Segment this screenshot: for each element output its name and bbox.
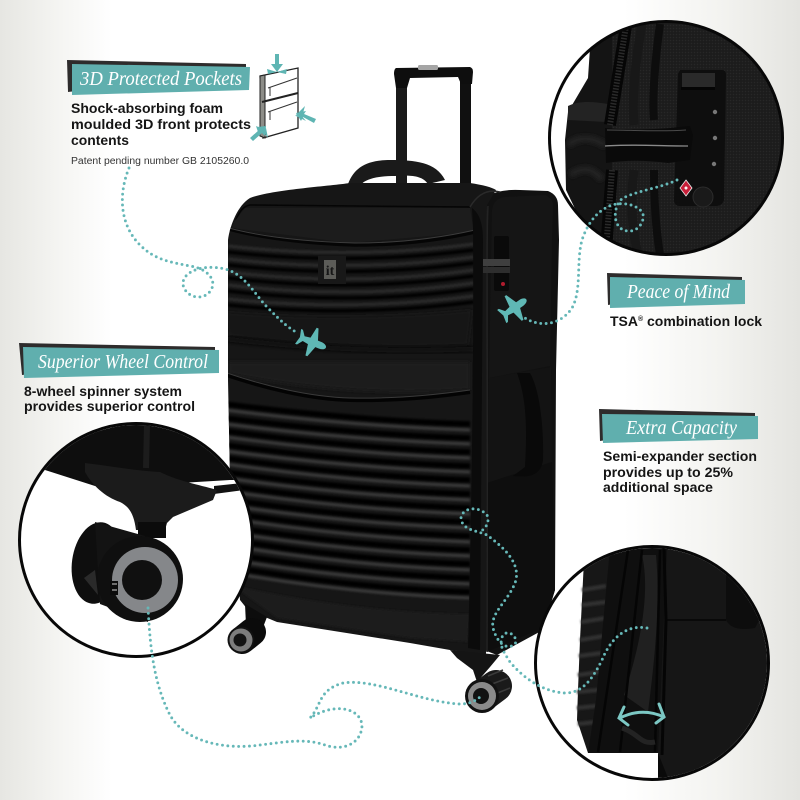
dotted route: lock to plane <box>522 180 677 324</box>
gusset <box>588 548 668 753</box>
right front wheel <box>465 670 510 713</box>
feature: Peace of Mind <box>607 273 762 329</box>
puffed panels <box>226 310 472 346</box>
description: additional space <box>603 479 713 495</box>
lower zip <box>227 375 470 400</box>
small lock <box>483 236 510 291</box>
moulded front edge <box>577 548 616 753</box>
lower ribs <box>225 404 470 598</box>
zoom circle: wheel <box>20 420 260 656</box>
description: provides superior control <box>24 398 195 414</box>
top panel <box>236 216 238 220</box>
feature: 3D Protected Pockets <box>67 54 316 167</box>
plane icon: front <box>292 322 332 362</box>
dotted route: wheel to wheel <box>148 608 480 747</box>
side carry handle <box>513 373 543 477</box>
upper zip <box>229 229 475 245</box>
wheel mounts <box>450 650 500 682</box>
description <box>603 448 757 495</box>
bracket <box>85 463 217 530</box>
description: Semi-expander section <box>603 448 757 464</box>
icon: pocket diagram <box>250 54 316 141</box>
upper ribs <box>228 244 474 311</box>
combination lock <box>605 70 726 207</box>
lid seam <box>236 205 470 220</box>
front panel <box>228 183 496 655</box>
dotted route: pockets to plane <box>122 168 298 333</box>
banner: Peace of Mind <box>626 281 731 303</box>
suitcase <box>225 65 559 713</box>
feature: Extra Capacity <box>599 409 758 495</box>
description: ® <box>638 315 644 323</box>
description: 8-wheel spinner system <box>24 383 182 399</box>
banner: 3D Protected Pockets <box>79 68 242 90</box>
zipper <box>606 26 626 250</box>
side panel <box>484 190 559 655</box>
right panel <box>658 549 767 778</box>
feature: Superior Wheel Control <box>19 343 219 414</box>
left back wheel <box>228 626 254 654</box>
dotted route: expander to loops <box>461 509 647 693</box>
telescopic handle <box>394 65 473 184</box>
patent note: Patent pending number GB 2105260.0 <box>71 156 249 167</box>
description: provides up to 25% <box>603 464 734 480</box>
banner <box>599 409 758 443</box>
banner <box>19 343 219 378</box>
description: moulded 3D front protects <box>71 116 251 132</box>
description: TSA <box>610 313 638 329</box>
zoom circle: lock <box>550 15 790 265</box>
it logo <box>318 256 346 284</box>
moulded ribs <box>565 37 612 233</box>
plane icon: side <box>493 287 535 329</box>
fabric <box>45 425 234 486</box>
carry handle <box>348 160 445 186</box>
description <box>71 100 251 148</box>
description: Shock-absorbing foam <box>71 100 223 116</box>
it logo: it <box>326 264 335 279</box>
wheel <box>67 519 183 622</box>
bottom puff <box>232 585 470 642</box>
banner: Superior Wheel Control <box>38 351 208 373</box>
icon: expansion arrow <box>619 704 664 725</box>
spine with zip <box>468 208 483 650</box>
description: combination lock <box>643 313 762 329</box>
banner <box>607 273 745 308</box>
zoom circle: expander <box>536 546 780 780</box>
description: contents <box>71 132 129 148</box>
banner <box>67 60 250 95</box>
banner: Extra Capacity <box>625 417 737 439</box>
description <box>24 383 195 414</box>
